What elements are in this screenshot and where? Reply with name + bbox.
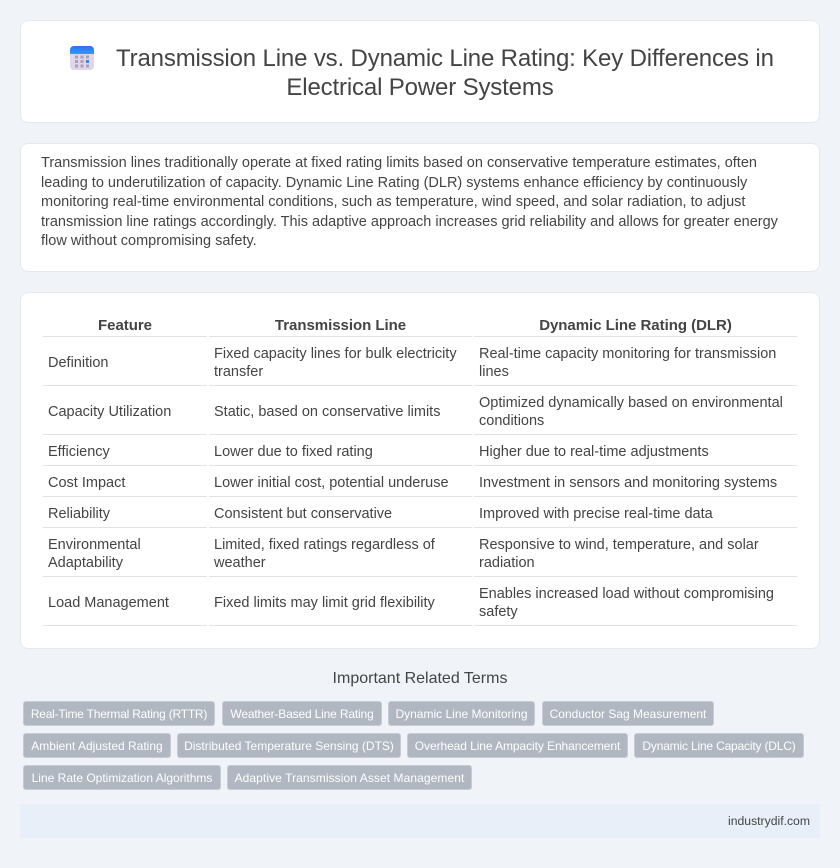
related terms tags: Adaptive Transmission Asset Management — [235, 771, 464, 785]
row: Load Management — [48, 586, 774, 620]
icon: calendar — [70, 46, 94, 70]
row: Capacity Utilization: Static, based on conservative limits — [214, 404, 440, 420]
row: Cost Impact: Cost Impact — [48, 475, 125, 491]
row: Definition: transfer — [214, 364, 263, 380]
panel: header — [20, 20, 820, 123]
table header: Feature: Feature — [98, 317, 152, 334]
row: Reliability: Reliability — [48, 506, 110, 522]
title: Electrical Power Systems — [286, 74, 554, 101]
row: Load Management: Load Management — [48, 595, 169, 611]
row: Load Management: Fixed limits may limit grid flexibility — [214, 595, 435, 611]
related terms tags: Ambient Adjusted Rating — [31, 739, 163, 753]
description text: flow without compromising safety. — [41, 233, 257, 249]
row: Environmental Adaptability: Adaptability — [48, 555, 123, 571]
row: Environmental Adaptability — [48, 537, 759, 571]
row: Environmental Adaptability: Responsive to wind, temperature, and solar — [479, 537, 759, 553]
table header: Dynamic Line Rating: Dynamic Line Rating (DLR) — [539, 317, 732, 334]
row: Environmental Adaptability: weather — [214, 555, 266, 571]
row: Capacity Utilization: Optimized dynamically based on environmental — [479, 395, 783, 411]
row: Definition: Real-time capacity monitoring for transmission — [479, 346, 776, 362]
related terms tags: Distributed Temperature Sensing (DTS) — [184, 739, 394, 753]
row: Cost Impact: Investment in sensors and monitoring systems — [479, 475, 777, 491]
row: Efficiency: Higher due to real-time adjustments — [479, 444, 709, 460]
row: Reliability: Improved with precise real-time data — [479, 506, 713, 522]
footer — [20, 804, 820, 838]
panel: comparison table — [20, 292, 820, 649]
row: Cost Impact: Lower initial cost, potential underuse — [214, 475, 449, 491]
row: Reliability — [48, 506, 713, 522]
description text: leading to underutilization of capacity. Dynamic Line Rating (DLR) systems enhance efficiency by continuously — [41, 175, 747, 191]
description text — [41, 155, 778, 249]
row: Definition: lines — [479, 364, 509, 380]
heading: Important Related Terms: Important Related Terms — [333, 670, 507, 687]
related terms tags: Dynamic Line Monitoring — [395, 707, 528, 721]
related terms tags: Conductor Sag Measurement — [550, 707, 706, 721]
related terms tags: Dynamic Line Capacity (DLC) — [642, 739, 796, 753]
row: Efficiency: Lower due to fixed rating — [214, 444, 373, 460]
related terms tags: Weather-Based Line Rating — [230, 707, 374, 721]
row: Capacity Utilization: conditions — [479, 413, 544, 429]
row: Environmental Adaptability: Environmental — [48, 537, 141, 553]
title — [116, 45, 774, 101]
row: Definition — [48, 346, 776, 380]
description text: Transmission lines traditionally operate at fixed rating limits based on conservative temperature estimates, often — [41, 155, 757, 171]
row: Load Management: Enables increased load without compromising — [479, 586, 774, 602]
row: Capacity Utilization: Capacity Utilization — [48, 404, 171, 420]
row: Environmental Adaptability: radiation — [479, 555, 535, 571]
description text: monitoring real-time environmental conditions, such as temperature, wind speed, and solar radiation, to adjust — [41, 194, 745, 210]
row: Efficiency — [48, 444, 709, 460]
panel: description — [20, 143, 820, 272]
table header: Transmission Line: Transmission Line — [275, 317, 406, 334]
related terms tags — [23, 701, 804, 790]
row: Cost Impact — [48, 475, 777, 491]
related terms tags: Line Rate Optimization Algorithms — [32, 771, 212, 785]
related terms tags: Overhead Line Ampacity Enhancement — [415, 739, 620, 753]
row: Capacity Utilization — [48, 395, 783, 429]
row: Reliability: Consistent but conservative — [214, 506, 392, 522]
footer source: industrydif.com — [728, 814, 810, 828]
row: Efficiency: Efficiency — [48, 444, 110, 460]
row: Definition: Definition — [48, 355, 108, 371]
description text: transmission line ratings accordingly. This adaptive approach increases grid reliability and allows for greater energy — [41, 214, 778, 230]
title: Transmission Line vs. Dynamic Line Rating: Key Differences in — [116, 45, 774, 72]
row: Environmental Adaptability: Limited, fixed ratings regardless of — [214, 537, 435, 553]
related terms tags: Real-Time Thermal Rating (RTTR) — [31, 707, 207, 721]
row: Definition: Fixed capacity lines for bulk electricity — [214, 346, 457, 362]
row: Load Management: safety — [479, 604, 518, 620]
